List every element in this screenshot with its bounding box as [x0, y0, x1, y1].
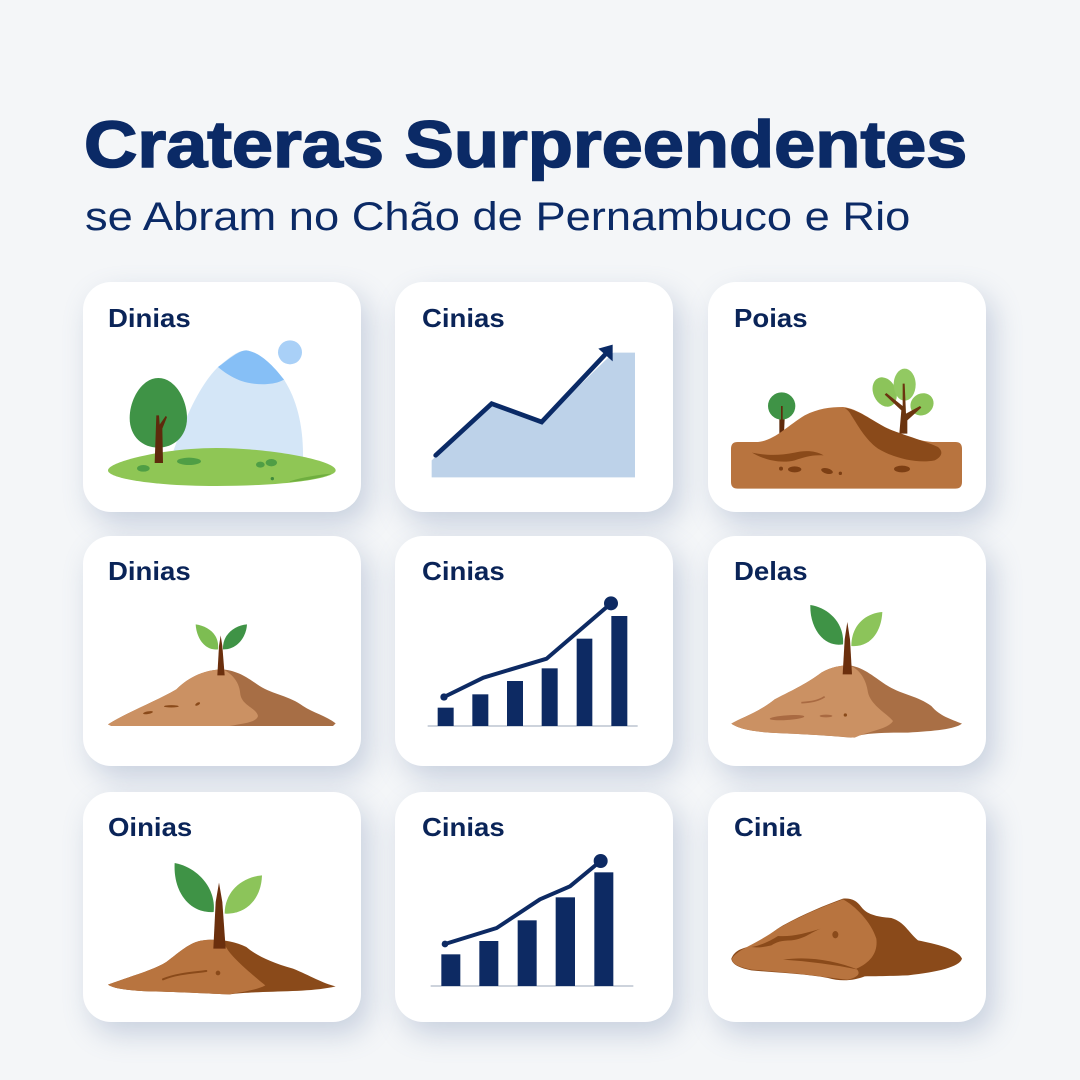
panel: Cinia soil mound: [708, 792, 986, 1022]
panel: Dinias sprout: [83, 536, 361, 766]
panel: Poias soil with trees: [708, 282, 986, 512]
label: Cinia: [734, 812, 801, 842]
icon: large sprout on mound: [731, 605, 962, 738]
label: Cinias: [422, 812, 505, 842]
label: Cinias: [422, 556, 505, 586]
label: Dinias: [108, 303, 191, 333]
subtitle: se Abram no Chão de Pernambuco e Rio: [85, 195, 910, 239]
icon: bare soil mound: [731, 898, 962, 980]
panel: Cinias bar chart 2: [395, 792, 673, 1022]
panel: Cinias area chart: [395, 282, 673, 512]
label: Cinias: [422, 303, 505, 333]
label: Poias: [734, 303, 808, 333]
label: Dinias: [108, 556, 191, 586]
label: Oinias: [108, 812, 192, 842]
chart: bars with trend line: [430, 854, 634, 987]
panel: Cinias bar chart 1: [395, 536, 673, 766]
chart: bars with trend line: [428, 596, 638, 727]
panel: Delas sprout: [708, 536, 986, 766]
icon: sprout on dark mound: [108, 863, 336, 994]
panel: Dinias landscape: [83, 282, 361, 512]
chart: rising area line: [432, 344, 635, 478]
icon: hill with tree and sun: [108, 340, 336, 486]
icon: sprout on mound: [108, 624, 336, 726]
icon: soil block and trees: [731, 368, 962, 489]
panel: Oinias sprout: [83, 792, 361, 1022]
title: Crateras Surpreendentes: [84, 107, 967, 181]
label: Delas: [734, 556, 808, 586]
